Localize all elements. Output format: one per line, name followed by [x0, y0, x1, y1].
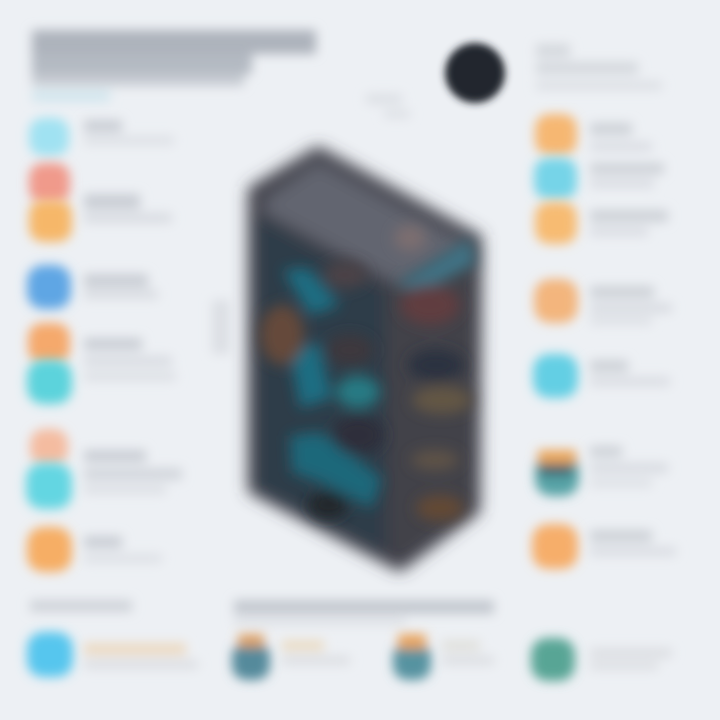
title: [32, 30, 316, 102]
icon: left blue: [27, 265, 71, 309]
server rack: [248, 146, 482, 572]
icon: left teal 1: [27, 360, 72, 404]
icon: right orange 1: [535, 114, 577, 155]
icon: left red: [29, 163, 70, 203]
icon: left cyan: [29, 118, 69, 156]
bottom text blocks: [84, 640, 672, 670]
icon: left orange 3: [27, 527, 72, 572]
icon: bottom mixed 2: [393, 634, 431, 680]
server colour panels: [260, 225, 476, 521]
left text blocks: [84, 120, 182, 563]
server body: [248, 146, 482, 572]
icon: dark circle: [445, 43, 505, 103]
icon: left orange 1: [29, 200, 72, 242]
icon: left peach: [30, 429, 68, 465]
bottom row icons: [27, 632, 672, 681]
icon: right cyan 2: [533, 354, 578, 398]
side annotations: [212, 94, 410, 354]
right text blocks: [536, 44, 676, 556]
left column items: [26, 118, 182, 572]
icon: right cyan 1: [534, 158, 577, 199]
icon: left orange 2: [28, 323, 70, 363]
icon: bottom mixed 1: [232, 634, 270, 680]
bottom section heading: [30, 600, 494, 625]
icon: right mixed: [535, 450, 579, 496]
icon: bottom green: [531, 638, 575, 681]
icon: right orange 3: [534, 279, 578, 323]
icon: left teal 2: [26, 463, 72, 509]
icon: right orange 4: [532, 524, 578, 569]
icon: right orange 2: [535, 202, 577, 244]
icon: bottom cyan: [27, 632, 73, 677]
right column items: [445, 43, 676, 569]
